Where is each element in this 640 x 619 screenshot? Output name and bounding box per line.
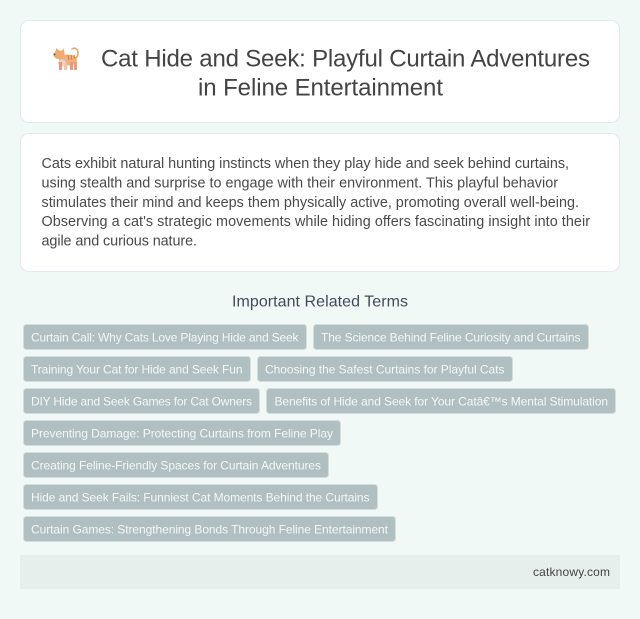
- description text: using stealth and surprise to engage with their environment. This playful behavior: [42, 175, 558, 191]
- tag: [24, 356, 250, 382]
- tag: [24, 516, 396, 542]
- tag: Training Your Cat for Hide and Seek Fun: [31, 362, 242, 376]
- tag: [24, 420, 340, 446]
- tag: [24, 484, 378, 510]
- description text: Cats exhibit natural hunting instincts when they play hide and seek behind curtains,: [42, 156, 569, 172]
- heading: related terms: Important Related Terms: [232, 294, 408, 310]
- tag: Creating Feline-Friendly Spaces for Curtain Adventures: [31, 458, 321, 472]
- title: in Feline Entertainment: [198, 74, 443, 102]
- tag: [24, 388, 260, 414]
- title: [101, 46, 590, 102]
- tag: [314, 324, 588, 350]
- tag: [24, 452, 328, 478]
- description text: agile and curious nature.: [42, 234, 197, 250]
- icon: cat: [54, 48, 78, 70]
- title: Cat Hide and Seek: Playful Curtain Adventures: [101, 46, 590, 72]
- panel: related term tags: [24, 324, 616, 542]
- tag: Preventing Damage: Protecting Curtains from Feline Play: [31, 426, 333, 440]
- tag: Hide and Seek Fails: Funniest Cat Moments Behind the Curtains: [31, 490, 370, 504]
- panel: title card: [20, 20, 620, 122]
- tag: Curtain Games: Strengthening Bonds Through Feline Entertainment: [31, 522, 389, 536]
- description text: stimulates their mind and keeps them physically active, promoting overall well-being.: [42, 195, 579, 211]
- tag: [258, 356, 512, 382]
- description text: [42, 156, 590, 250]
- footer: catknowy.com: [533, 565, 610, 579]
- tag: The Science Behind Feline Curiosity and Curtains: [321, 330, 580, 344]
- tag: DIY Hide and Seek Games for Cat Owners: [31, 394, 252, 408]
- tag: [266, 388, 616, 414]
- description text: Observing a cat's strategic movements while hiding offers fascinating insight into their: [42, 214, 590, 230]
- tag: Benefits of Hide and Seek for Your Catâ€™s Mental Stimulation: [274, 394, 608, 408]
- tag: Choosing the Safest Curtains for Playful Cats: [265, 362, 504, 376]
- footer: [20, 555, 620, 589]
- panel: description card: [20, 134, 620, 272]
- tag: Curtain Call: Why Cats Love Playing Hide and Seek: [31, 330, 300, 344]
- tag: [24, 324, 306, 350]
